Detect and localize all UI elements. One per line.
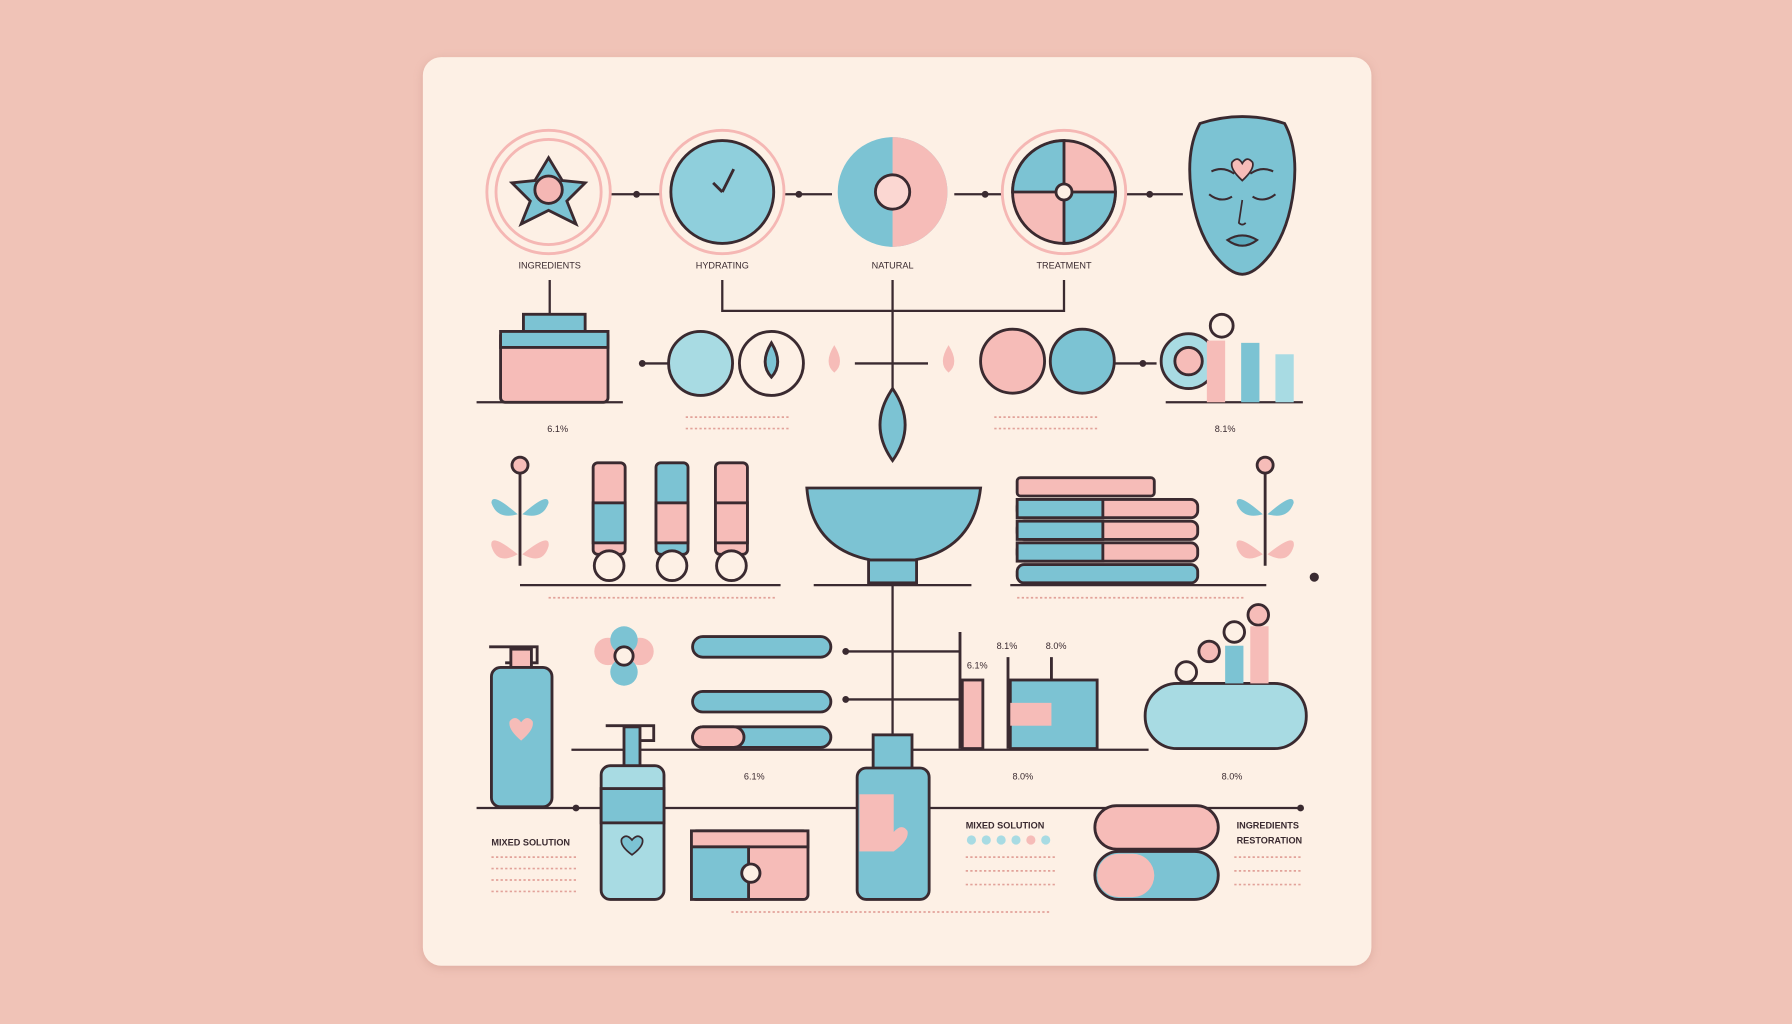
labels row 1: NATURAL bbox=[872, 261, 914, 271]
labels row 1: INGREDIENTS bbox=[519, 261, 581, 271]
row 1 icons bbox=[487, 117, 1295, 274]
text: MIXED SOLUTION bbox=[491, 838, 570, 848]
text: 6.1% bbox=[967, 661, 988, 671]
labels row 1: HYDRATING bbox=[696, 261, 749, 271]
row 4 bbox=[489, 605, 1306, 807]
panel: card bbox=[423, 57, 1371, 966]
text: 6.1% bbox=[744, 771, 765, 781]
text: INGREDIENTS bbox=[1237, 821, 1299, 831]
connectors bbox=[477, 194, 1303, 808]
text: 8.1% bbox=[997, 641, 1017, 651]
labels row 1: TREATMENT bbox=[1036, 261, 1092, 271]
text: 8.0% bbox=[1012, 771, 1033, 781]
text: 6.1% bbox=[547, 424, 568, 434]
text: 8.1% bbox=[1215, 424, 1236, 434]
row 2 bbox=[501, 314, 1294, 461]
text: MIXED SOLUTION bbox=[966, 821, 1044, 831]
row 5 bbox=[601, 726, 1218, 899]
text lines bbox=[491, 417, 1303, 912]
row 3 bbox=[491, 457, 1294, 583]
text: 8.0% bbox=[1222, 771, 1242, 781]
text: 8.0% bbox=[1046, 641, 1067, 651]
labels row 1 bbox=[519, 261, 1092, 271]
text: RESTORATION bbox=[1237, 835, 1302, 845]
